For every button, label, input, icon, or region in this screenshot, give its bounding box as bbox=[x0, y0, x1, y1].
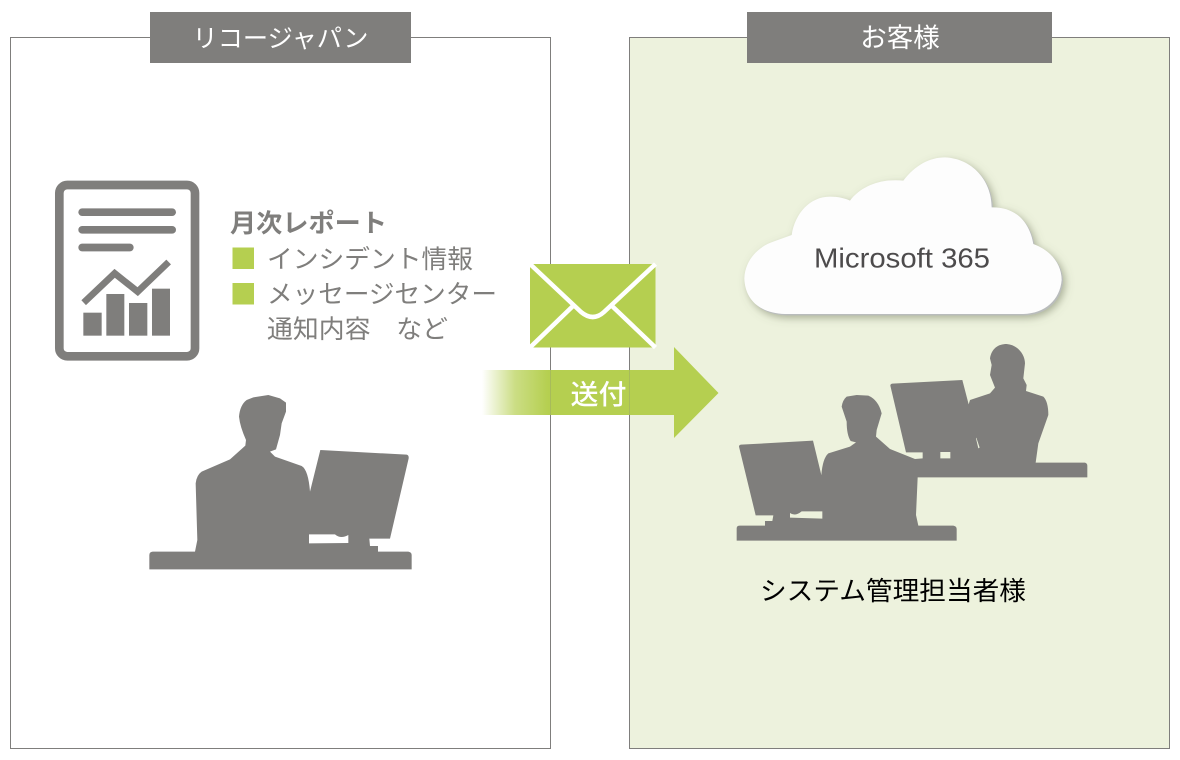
woman at desk bbox=[890, 344, 1087, 477]
icon: envelope bbox=[530, 264, 656, 348]
label: send: 送付 bbox=[570, 379, 626, 410]
icon: cloud Microsoft 365 bbox=[744, 157, 1063, 315]
bullet: message center: 通知内容 など bbox=[267, 316, 448, 344]
bullet: incident information: インシデント情報 bbox=[267, 246, 473, 274]
heading: customer: お客様 bbox=[860, 23, 940, 53]
panel: customer bbox=[630, 38, 1170, 748]
man at desk bbox=[737, 395, 957, 541]
heading: Ricoh Japan: リコージャパン bbox=[192, 25, 368, 53]
illustration: two administrators at desks bbox=[737, 344, 1087, 541]
heading: Ricoh Japan bbox=[150, 12, 411, 63]
illustration: person at desk bbox=[149, 395, 412, 569]
icon: cloud Microsoft 365: Microsoft 365 bbox=[814, 242, 990, 274]
icon: report document bbox=[59, 185, 195, 356]
arrow: send bbox=[482, 347, 718, 438]
report title: 月次レポート bbox=[230, 210, 387, 238]
panel: Ricoh Japan bbox=[10, 38, 550, 748]
bullet: message center bbox=[232, 281, 497, 344]
heading: customer bbox=[747, 12, 1052, 63]
text block: monthly report contents bbox=[230, 210, 497, 344]
bullet: message center: メッセージセンター bbox=[267, 281, 497, 309]
caption: system administrators: システム管理担当者様 bbox=[760, 576, 1026, 606]
